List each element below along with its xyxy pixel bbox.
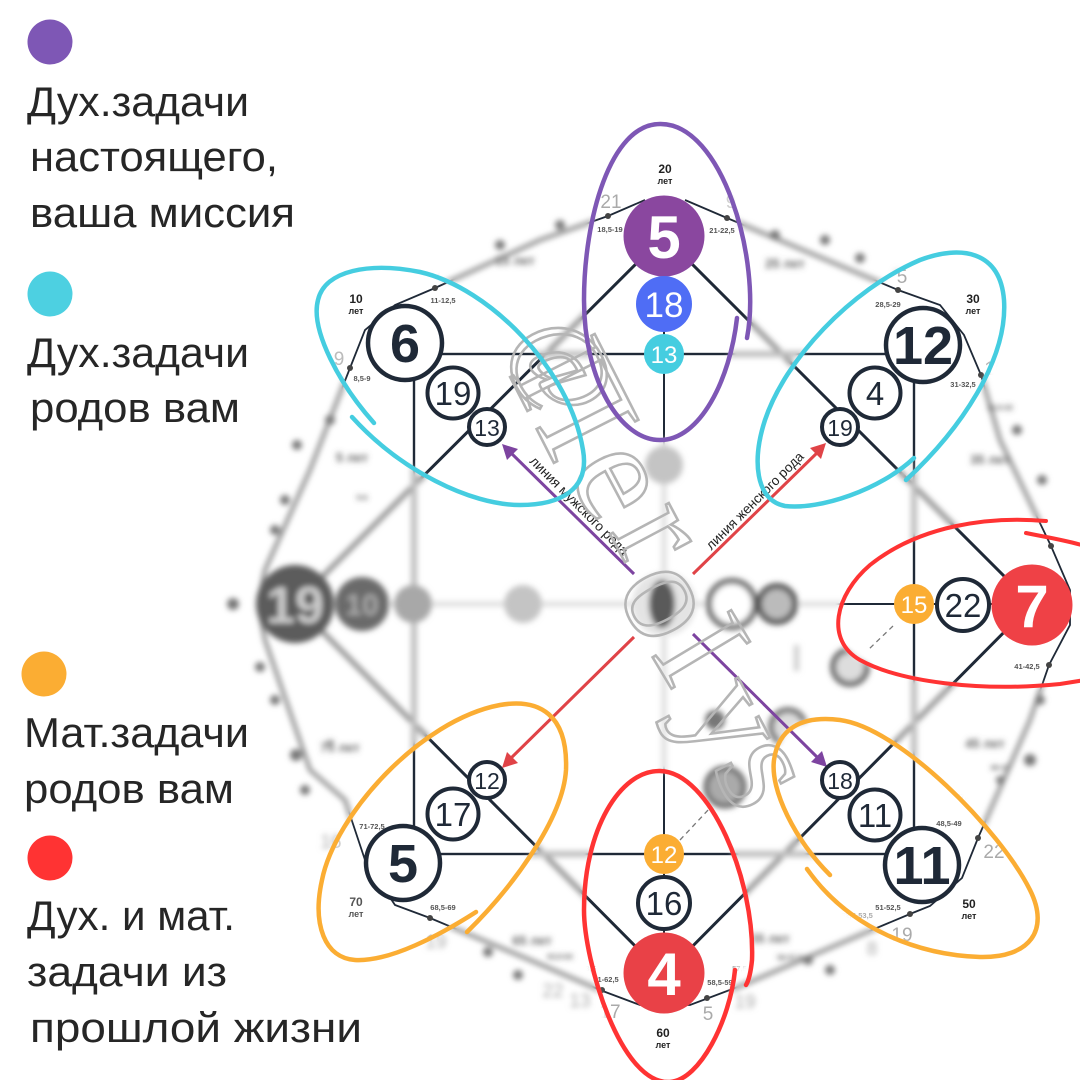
node group: bottom-right: 11 [858,797,892,834]
outer age range labels: 71-72,5 [359,822,385,831]
outer age range labels: 41-42,5 [1014,662,1040,671]
outer numbers: 16 [320,832,342,853]
hand-drawn oval: purple top [584,124,750,440]
node group: top: 5 [647,204,681,271]
outer age range labels: 8,5-9 [353,374,371,383]
legend icon: purple [28,20,72,64]
outer age range labels [353,225,1040,987]
legend text: spiritual tasks of the present: настоящего, [30,133,278,180]
watermark: o [587,530,757,664]
blurred matrix background: 25 лет [765,256,805,271]
line arrows [502,443,827,768]
blurred matrix background: 46-47 [990,763,1010,772]
hand-drawn oval: orange bottom-left [319,704,566,960]
dashed connectors [680,626,893,840]
blurred matrix background: 13 [569,991,591,1012]
age labels: лет [962,911,977,921]
node group: top [624,196,704,374]
node group: top: 18 [645,286,683,325]
legend text: material tasks of the lineage: родов вам [24,765,234,812]
blurred matrix background: 45 лет [965,736,1005,751]
legend text: past life tasks: Дух. и мат. [27,892,235,939]
age labels: 30 [966,292,980,306]
outer numbers: 22 [983,842,1005,863]
legend text: past life tasks: прошлой жизни [30,1004,362,1051]
age labels: 70 [349,895,363,909]
outer age range labels: 18,5-19 [597,225,623,234]
watermark: @ [493,294,642,434]
age labels: лет [966,306,981,316]
node group: top-right: 4 [866,375,884,412]
outer age range labels: 57,5-58,5 [732,964,764,973]
outer numbers: 9 [726,192,736,213]
blurred matrix background: 19 [734,992,756,1013]
blurred matrix background: 19 [266,577,324,635]
legend text: material tasks of the lineage: Мат.задачи [24,709,249,756]
watermark: y [653,648,823,782]
legend text: past life tasks: задачи из [27,948,227,995]
blurred matrix background: 5-6 [357,493,367,502]
node group: bottom-left: 12 [474,768,500,794]
outer numbers: 19 [891,925,913,946]
age labels: лет [656,1040,671,1050]
outer dots [347,213,1054,1001]
age labels: 10 [349,292,363,306]
age labels: лет [349,909,364,919]
outer age range labels: 21-22,5 [709,226,735,235]
legend text: spiritual tasks of the lineage: родов вам [30,384,240,431]
node group: top-right: 12 [893,316,953,376]
blurred matrix background: 22 [542,981,564,1002]
age labels: лет [349,306,364,316]
watermark: П [480,315,670,481]
node group: bottom: 12 [651,842,677,869]
node group: bottom [624,834,704,1014]
hand-drawn oval: cyan top-left [317,268,584,505]
legend text: spiritual tasks of the present [27,78,295,236]
node group: top-left: 13 [474,415,500,441]
node group: right: 7 [1015,573,1049,640]
outer age range labels: 51-52,5 [875,903,901,912]
legend text: material tasks of the lineage [24,709,249,812]
blurred matrix background: 16 [320,832,342,853]
node group: bottom: 16 [646,885,682,922]
watermark: r [580,472,744,589]
outer numbers [320,192,1006,1025]
blurred matrix background: 8 [867,939,877,960]
outer numbers: 5 [703,1004,713,1025]
watermark: s [682,704,856,833]
legend icon: cyan [28,272,72,316]
node group: bottom-left: 17 [435,796,471,833]
outer age range labels: 58,5-59 [707,978,733,987]
node group: top-left: 6 [390,314,420,374]
age labels: 50 [962,897,976,911]
outer numbers: 9 [334,349,344,370]
legend text: spiritual tasks of the present: Дух.задачи [27,78,249,125]
node group: top-left [368,306,505,445]
watermark [480,294,856,833]
outer numbers: 5 [897,267,907,288]
outer numbers: 19 [734,992,756,1013]
legend text: spiritual tasks of the lineage [27,329,249,431]
outer numbers: 17 [599,1002,621,1023]
outer age range labels: 62,5-63,5 [564,964,596,973]
blurred matrix background: 19 [425,932,447,953]
hand-drawn oval: cyan top-right [758,253,1004,507]
blurred matrix background: 35 лет [970,452,1010,467]
age labels [349,162,981,1050]
outer age range labels: 52,5-53,5 [841,911,873,920]
blurred matrix background: 15 лет [495,253,535,268]
node group: bottom-right: 11 [893,836,951,896]
outer numbers: 16 [984,359,1006,380]
outer age range labels: 47,5-48 [956,792,982,801]
age labels: лет [658,176,673,186]
blurred matrix background [227,200,1070,1013]
blurred matrix background: 5 лет [336,450,368,465]
node group: top: 13 [651,342,677,369]
outer numbers: 13 [569,991,591,1012]
outer age range labels: 28,5-29 [875,300,901,309]
legend text: spiritual tasks of the lineage: Дух.задачи [27,329,249,376]
blurred matrix background: 11 [892,267,912,288]
outer age range labels: 48,5-49 [936,819,962,828]
age labels: 20 [658,162,672,176]
blurred matrix background: 10 [345,589,379,622]
blurred matrix background: 56-57,5 [777,953,803,962]
outer age range labels: 11-12,5 [430,296,456,305]
outer numbers: 19 [425,932,447,953]
node group: bottom-right: 18 [827,768,853,794]
node group: right: 15 [901,592,927,619]
outer age range labels: 61-62,5 [593,975,619,984]
node group: top-right [822,308,960,445]
blurred matrix background: 65 лет [512,933,552,948]
node group: top-right: 19 [827,415,853,441]
node group: bottom-right [822,762,959,902]
sharp matrix lines [258,200,1070,1005]
hand-drawn oval: red bottom [584,771,752,1080]
blurred matrix background: 75 лет [320,740,360,755]
line label: male: линия мужского рода [527,453,632,559]
node group: bottom-left: 5 [388,834,418,894]
legend text: spiritual tasks of the present: ваша миссия [30,189,295,236]
node group: bottom-left [366,762,505,900]
node group: right: 22 [945,587,981,624]
node group: bottom: 4 [647,941,681,1008]
node group: top-left: 19 [435,375,471,412]
outer age range labels: 68,5-69 [430,903,456,912]
legend text: past life tasks [27,892,362,1051]
blurred matrix background: 75 [326,738,334,747]
blurred matrix background: 55 лет [750,931,790,946]
outer age range labels: 31-32,5 [950,380,976,389]
blurred matrix background: 63,5-64 [547,952,574,961]
watermark: e [539,410,710,542]
age labels: 60 [656,1026,670,1040]
hand-drawn oval: orange bottom-right [774,719,1038,957]
hand-drawn oval: red right [838,520,1080,687]
legend icon: orange [22,652,66,696]
sharp matrix areas inside ovals [334,194,1076,1020]
outer numbers: 21 [600,192,622,213]
watermark: I [623,589,780,709]
node group: right [894,564,1072,646]
legend icon: red [28,836,72,880]
line label: female: линия женского рода [703,449,807,553]
blurred matrix background: 32,5-33 [987,403,1013,412]
outer numbers: 5 [431,260,441,281]
